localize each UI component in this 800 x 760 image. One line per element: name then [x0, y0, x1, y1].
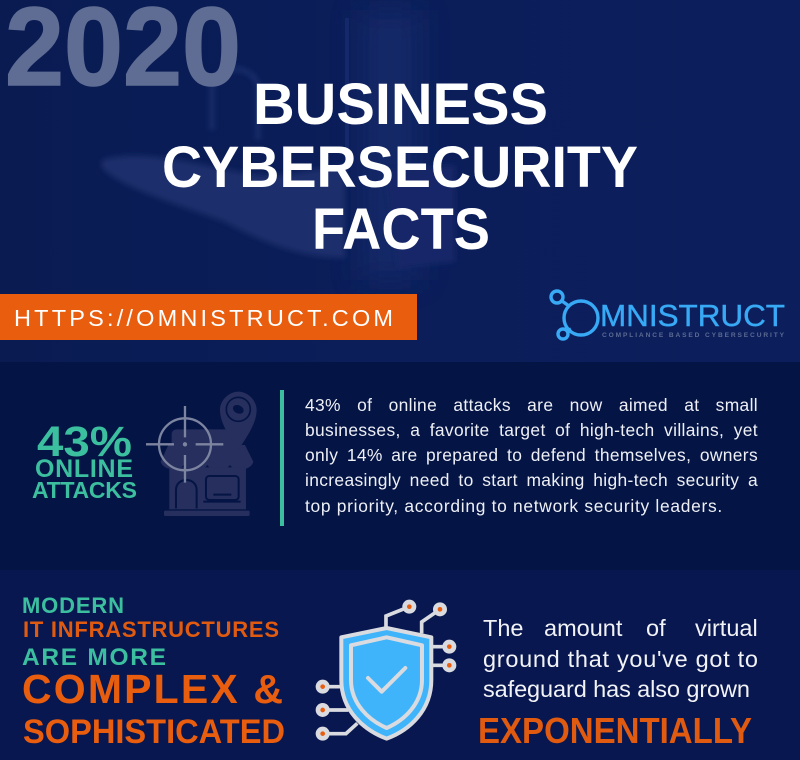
text block: complex and sophisticated [22, 593, 285, 751]
text block: virtual ground: of [646, 615, 666, 641]
url banner [0, 294, 417, 340]
icon: circuit nodes [316, 600, 456, 741]
stat: 43% online attacks: 43% [37, 418, 132, 466]
stat: 43% online attacks: ATTACKS [32, 477, 137, 503]
icon: store with map pin and crosshair [146, 392, 257, 516]
icon: circuit traces [323, 607, 449, 734]
divider: accent bar [280, 390, 284, 526]
text block: complex and sophisticated: SOPHISTICATED [23, 713, 285, 751]
stat: 43% online attacks: ONLINE [35, 455, 133, 483]
text block: virtual ground: virtual [695, 615, 758, 641]
text block: small business attacks paragraph: businesses, a favorite target of high-tech villains, yet [305, 420, 758, 440]
text block: small business attacks paragraph: only 14% are prepared to defend themselves, owners [305, 445, 758, 465]
icon: crosshair [146, 406, 223, 483]
url banner: HTTPS://OMNISTRUCT.COM [14, 305, 393, 331]
icon: logo node ring [551, 291, 598, 339]
logo: Omnistruct: MNISTRUCT [600, 298, 785, 333]
text block: small business attacks paragraph [305, 394, 758, 516]
icon: map pin [220, 392, 257, 450]
stat: 43% online attacks [32, 418, 137, 503]
text block: complex and sophisticated: COMPLEX & [22, 666, 283, 712]
text block: complex and sophisticated: ARE MORE [22, 644, 166, 671]
title: BUSINESS [253, 72, 548, 137]
panel: online attacks band [0, 362, 800, 570]
text block: complex and sophisticated: IT INFRASTRUCTURES [23, 617, 279, 642]
callout: exponentially: EXPONENTIALLY [478, 710, 752, 751]
text block: virtual ground [483, 615, 758, 702]
text block: small business attacks paragraph: top priority, according to network security leaders. [305, 496, 723, 516]
text block: complex and sophisticated: MODERN [22, 593, 124, 618]
icon: shield [341, 628, 431, 739]
title: FACTS [312, 197, 490, 262]
panel: bottom band [0, 570, 800, 760]
text block: virtual ground: amount [544, 615, 623, 641]
logo: Omnistruct: COMPLIANCE BASED CYBERSECURITY [602, 332, 785, 339]
icon: store [161, 429, 253, 516]
title [162, 72, 638, 262]
title: CYBERSECURITY [162, 135, 638, 200]
text block: small business attacks paragraph: 43% of online attacks are now aimed at small [305, 394, 758, 414]
panel: header background [0, 0, 800, 362]
text block: virtual ground: ground that you've got to [483, 646, 758, 672]
icon: shield with circuit nodes [316, 600, 456, 741]
text block: small business attacks paragraph: increasingly need to start making high-tech security a [305, 470, 758, 490]
text block: virtual ground: The [483, 615, 524, 641]
text block: virtual ground: safeguard has also grown [483, 676, 750, 702]
logo: Omnistruct [551, 291, 785, 339]
